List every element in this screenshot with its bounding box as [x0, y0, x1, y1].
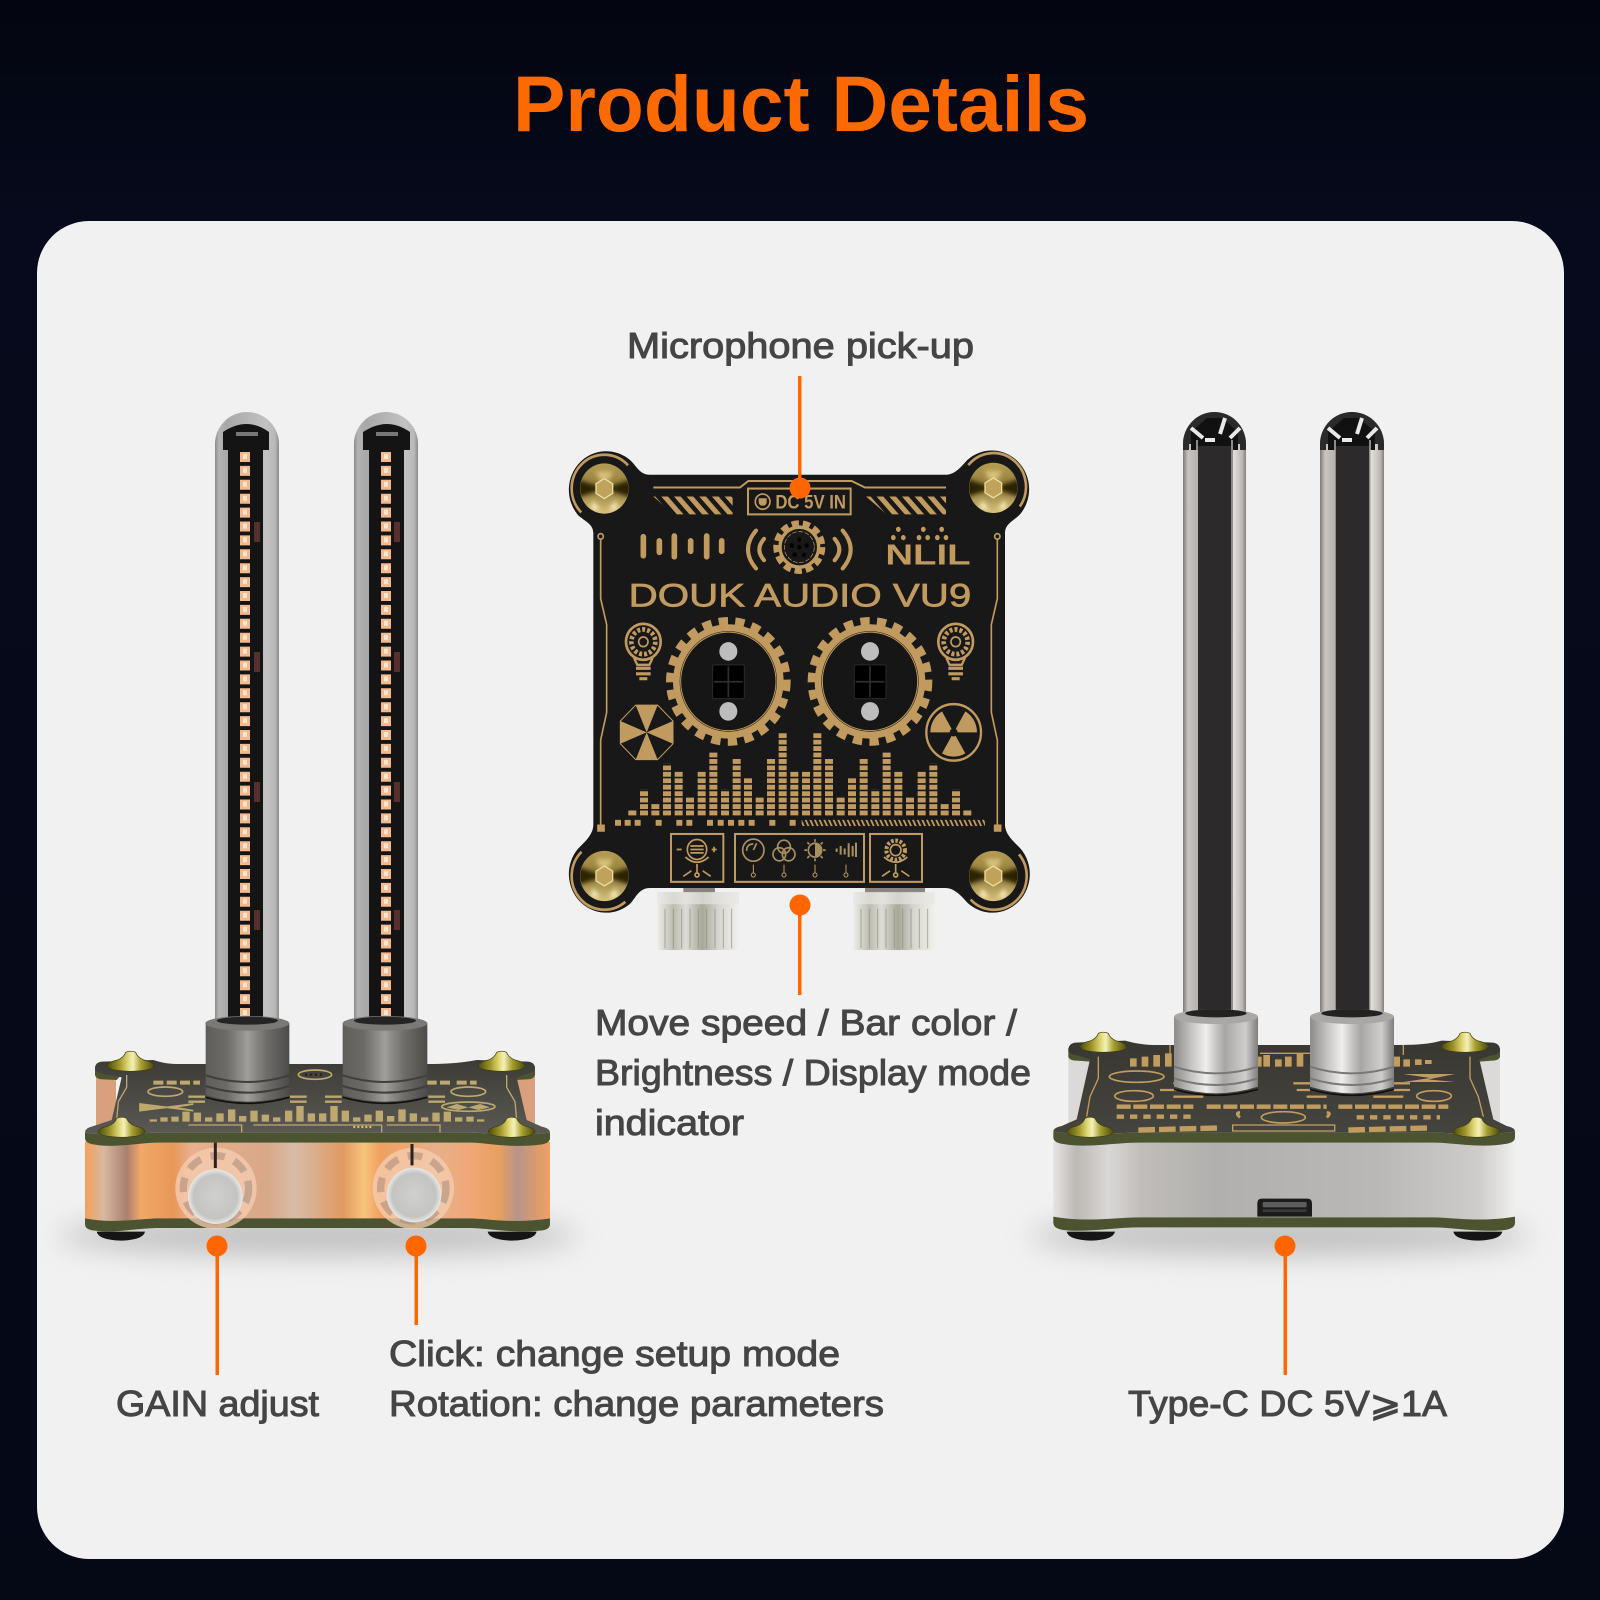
collar left — [1174, 1009, 1258, 1095]
right clear knob — [853, 883, 935, 950]
callout: indicator lights: Move speed / Bar color / — [595, 1002, 1017, 1043]
top circuit board — [85, 1060, 550, 1135]
left clear knob — [657, 883, 739, 950]
callout: indicator lights: indicator — [595, 1102, 744, 1143]
right device base — [1053, 1009, 1515, 1241]
gold board traces — [1087, 1045, 1483, 1130]
gold board icons — [117, 1070, 517, 1132]
olive bottom plate — [1053, 1217, 1515, 1231]
microphone gear icon — [748, 523, 851, 571]
right mode box icon — [870, 834, 922, 882]
left tube one — [215, 412, 279, 1030]
olive front plate edge — [1053, 1132, 1515, 1146]
olive bottom plate — [85, 1218, 550, 1231]
right tube two — [1320, 412, 1384, 1020]
rear plate edge — [95, 1067, 535, 1080]
title: Product Details — [513, 59, 1089, 148]
lower signal row — [615, 820, 985, 826]
left mode box icon — [671, 834, 723, 882]
callout: microphone pick-up: Microphone pick-up — [627, 325, 974, 366]
product: right tube device, rear view — [1030, 412, 1530, 1256]
callout: GAIN adjust — [116, 1236, 319, 1424]
feet — [97, 1232, 537, 1241]
mode knob — [373, 1144, 454, 1229]
brass dome screws — [98, 1051, 535, 1137]
olive front plate edge — [85, 1133, 550, 1146]
XLUL style logo — [885, 529, 971, 570]
rear label text — [1233, 1125, 1335, 1131]
center indicators box — [735, 834, 864, 882]
left tube two — [354, 412, 418, 1030]
brass dome screws — [1067, 1032, 1500, 1137]
gain knob — [175, 1143, 257, 1229]
corner screw bottom right — [963, 851, 1023, 901]
product: left tube device with lit bars — [58, 412, 578, 1256]
gold solder dots — [353, 1123, 373, 1130]
callout: Type-C power — [1128, 1236, 1447, 1424]
gold equalizer traces — [153, 1106, 481, 1122]
left gear socket — [670, 621, 787, 742]
equalizer bars — [632, 732, 967, 815]
rear posts — [96, 1068, 535, 1135]
corner gold arcs — [558, 439, 1040, 924]
umbrella icon — [620, 705, 673, 760]
callout: click and rotation: Rotation: change parameters — [389, 1383, 884, 1424]
top gold trace and hazard stripes — [653, 481, 946, 514]
rear posts — [1068, 1053, 1500, 1127]
right tube one — [1183, 412, 1246, 1020]
product: VU9 circuit board top view — [558, 439, 1040, 950]
board model name: DOUK AUDIO VU9 — [629, 577, 971, 614]
floor shadow left — [58, 1216, 578, 1256]
callout: click and rotation: Click: change setup mode — [389, 1333, 840, 1374]
callout: indicator lights — [595, 894, 1031, 1143]
callout: click and rotation — [389, 1236, 884, 1424]
callout: GAIN adjust: GAIN adjust — [116, 1383, 319, 1424]
DC 5V IN label box — [748, 489, 851, 514]
collar left — [205, 1016, 289, 1103]
DC 5V IN label box: DC 5V IN — [775, 492, 846, 514]
silver body — [1053, 1142, 1515, 1220]
rear plate edge — [1068, 1048, 1500, 1062]
copper body — [85, 1142, 550, 1221]
collar right — [1310, 1009, 1394, 1095]
feet — [1067, 1232, 1502, 1241]
corner screw top right — [963, 463, 1023, 513]
right bulb icon — [938, 624, 973, 679]
callout: indicator lights: Brightness / Display mode — [595, 1052, 1031, 1093]
callout: Type-C power: Type-C DC 5V⩾1A — [1128, 1383, 1447, 1424]
radiation icon — [926, 704, 981, 761]
microphone holes — [305, 1071, 325, 1078]
side traces — [598, 534, 1001, 831]
callout: microphone pick-up — [627, 325, 974, 498]
corner screw top left — [574, 463, 634, 514]
right gear socket — [811, 621, 929, 742]
left device base — [85, 1016, 550, 1241]
collar right — [343, 1016, 427, 1103]
floor shadow right — [1030, 1216, 1530, 1256]
XLUL style logo: NLIL — [885, 539, 971, 570]
left bulb icon — [626, 624, 661, 679]
sound bars glyph — [643, 536, 722, 557]
corner screw bottom left — [574, 851, 634, 901]
panel: product details card — [37, 221, 1564, 1559]
top circuit board — [1053, 1041, 1515, 1134]
board silhouette — [569, 451, 1030, 913]
USB Type-C port — [1257, 1199, 1312, 1217]
